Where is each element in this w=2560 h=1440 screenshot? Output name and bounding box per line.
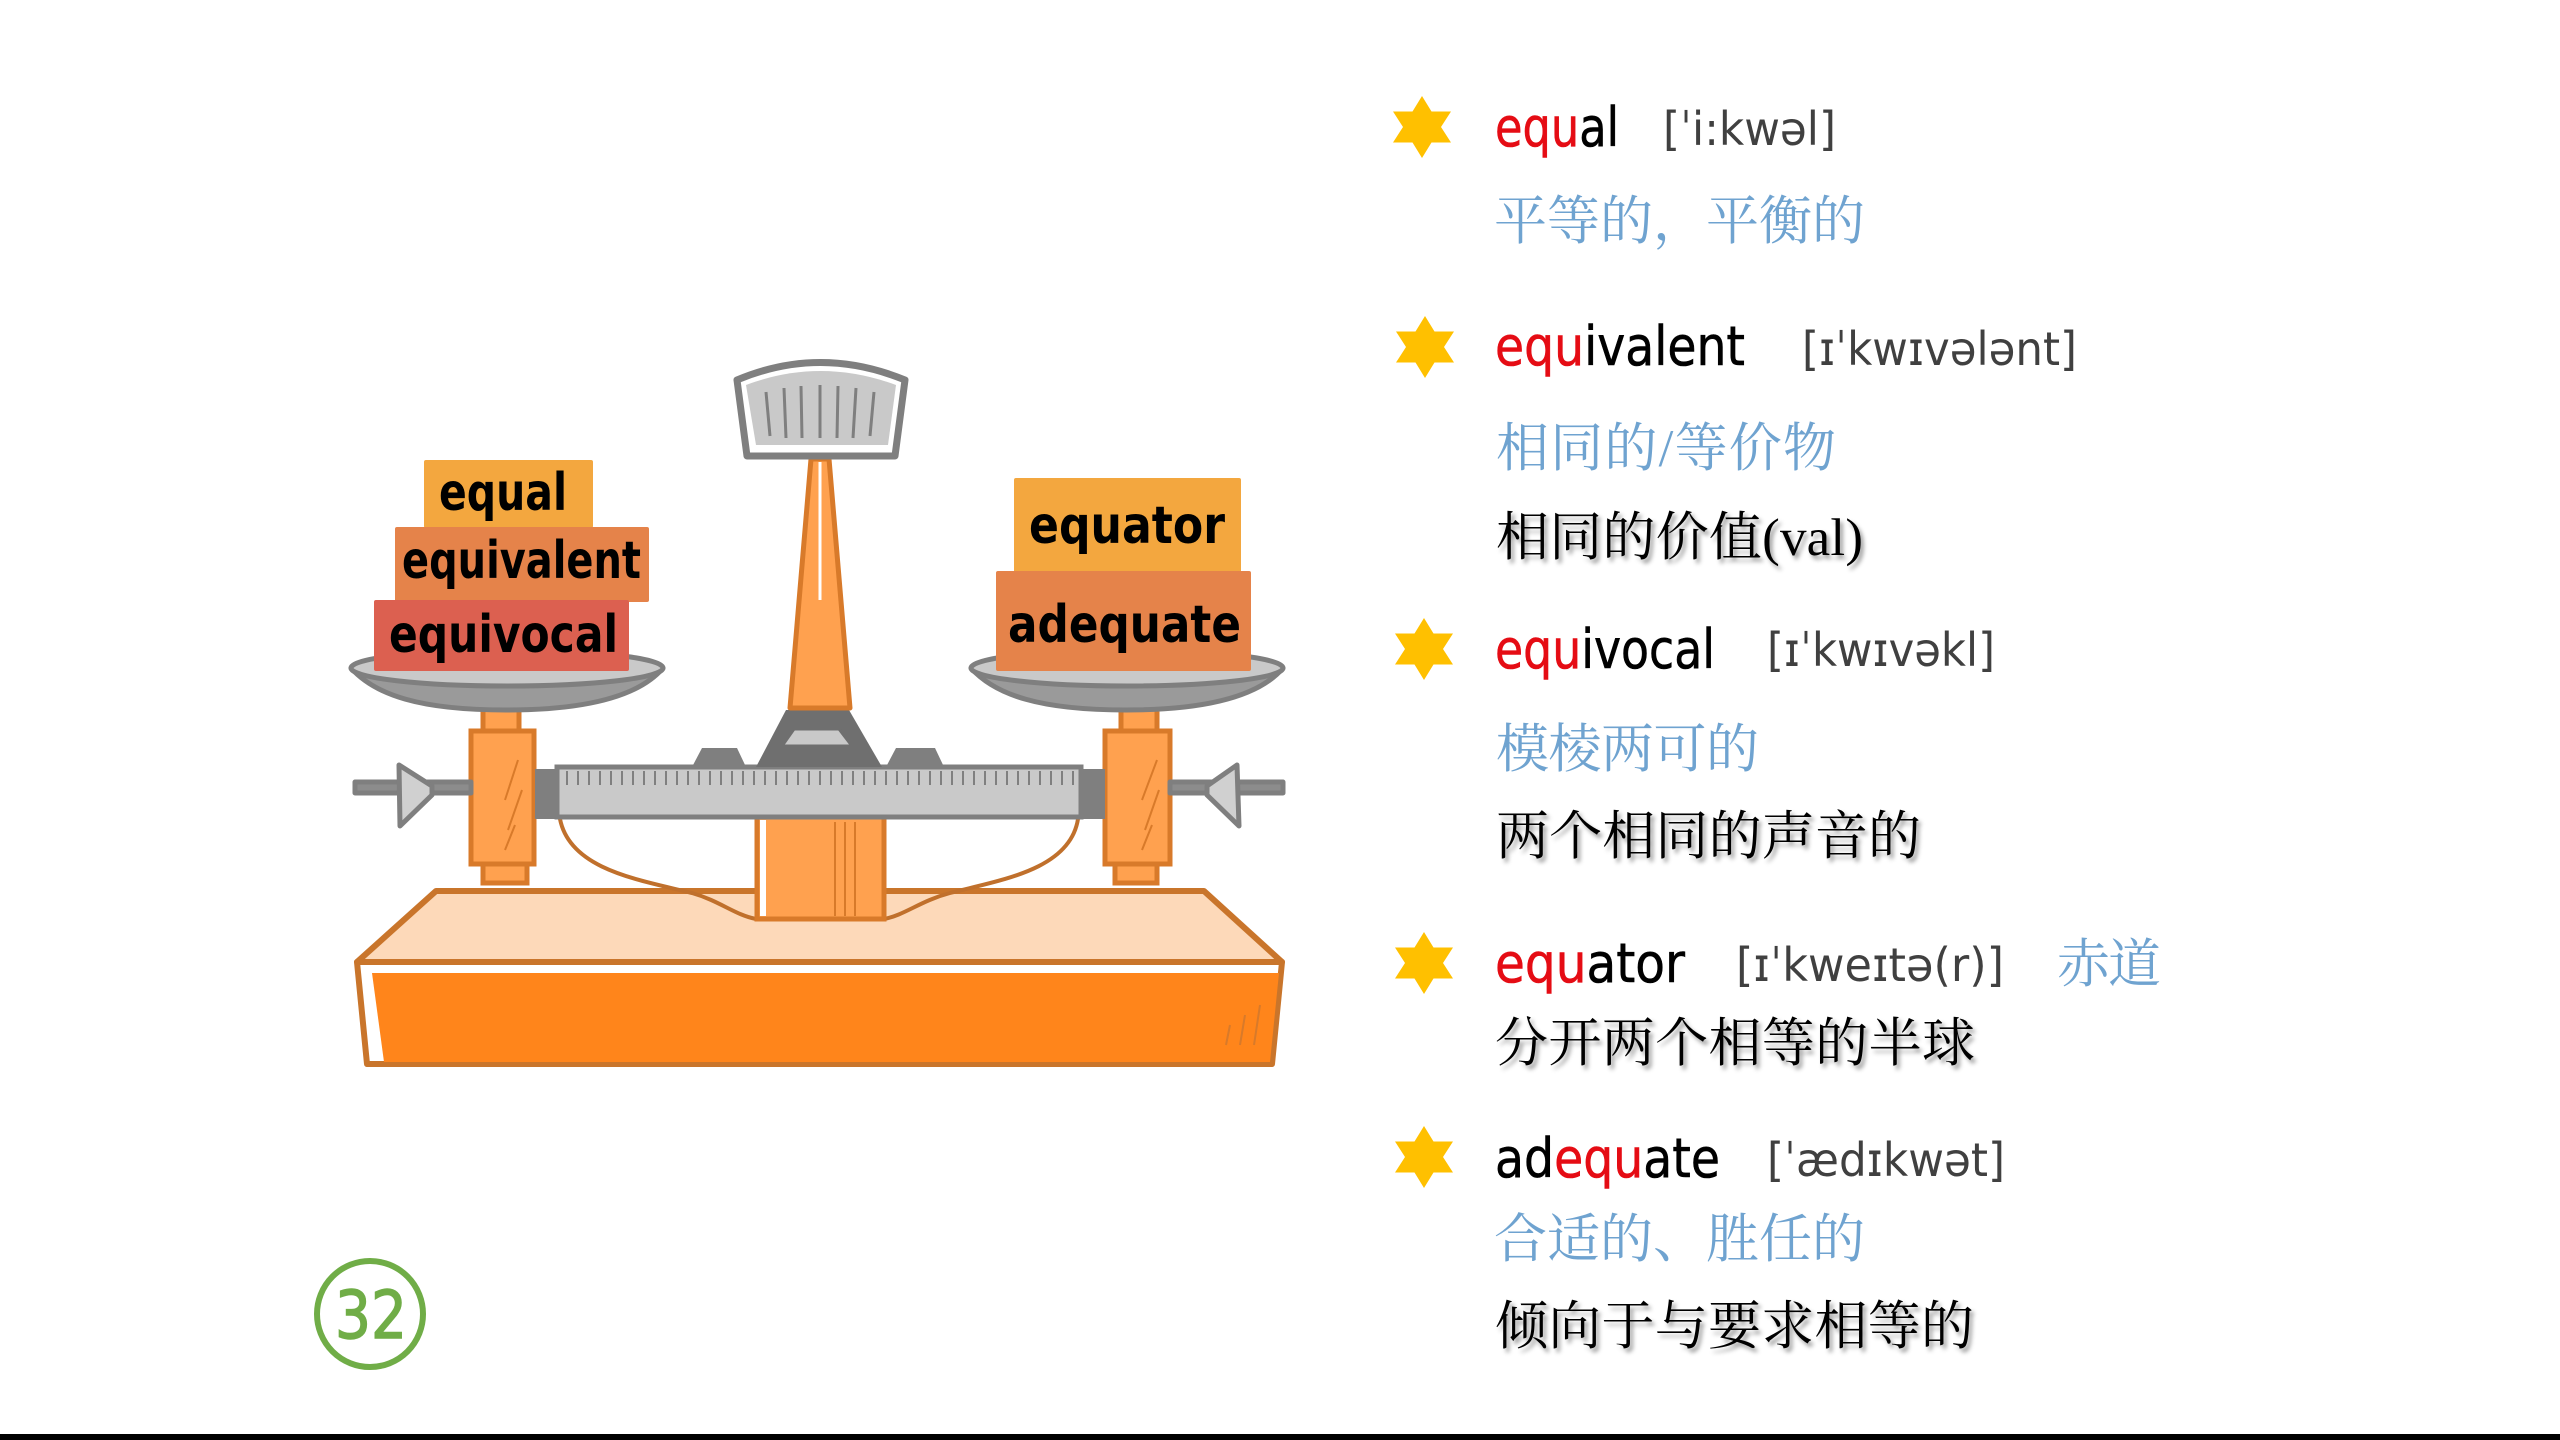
icon: star xyxy=(1395,932,1453,994)
page number badge: 32 xyxy=(335,1277,407,1354)
icon: star xyxy=(1395,618,1453,680)
wires xyxy=(560,819,1078,919)
word: equal xyxy=(1495,96,1619,159)
phonetic: [ɪˈkweɪtə(r)] xyxy=(1736,938,2004,992)
meaning: 赤道 xyxy=(2057,936,2161,994)
phonetic: [ˈædɪkwət] xyxy=(1767,1133,2005,1187)
block: equator: equator xyxy=(1029,496,1225,556)
block: equivocal: equivocal xyxy=(389,605,618,665)
right post xyxy=(1105,708,1170,883)
word: equivocal xyxy=(1495,618,1715,681)
block: equivalent: equivalent xyxy=(402,531,641,591)
bottom black bar xyxy=(0,1434,2560,1440)
memory note: 倾向于与要求相等的 xyxy=(1495,1298,1974,1356)
page number badge xyxy=(317,1261,423,1367)
meaning: 平等的，平衡的 xyxy=(1494,193,1865,251)
phonetic: [ˈi:kwəl] xyxy=(1663,102,1836,156)
illustration: balance scale xyxy=(351,362,1283,1064)
memory note: 相同的价值(val) xyxy=(1496,509,1863,567)
block: adequate: adequate xyxy=(1008,595,1241,655)
memory note: 分开两个相等的半球 xyxy=(1495,1015,1975,1073)
meaning: 合适的、胜任的 xyxy=(1494,1211,1865,1269)
entry: equivocal xyxy=(1395,618,1995,866)
word: equator xyxy=(1495,932,1686,995)
left post xyxy=(471,708,534,883)
meaning: 模棱两可的 xyxy=(1496,721,1759,779)
meaning: 相同的/等价物 xyxy=(1496,420,1836,478)
pointer support xyxy=(692,710,944,767)
entry: adequate xyxy=(1395,1126,2005,1356)
icon: star xyxy=(1395,1126,1453,1188)
entry: equator xyxy=(1395,932,2161,1073)
block: adequate xyxy=(996,571,1251,671)
block: equator xyxy=(1014,478,1241,573)
center column xyxy=(757,817,884,919)
phonetic: [ɪˈkwɪvəkl] xyxy=(1767,623,1995,677)
block: equal: equal xyxy=(439,463,567,523)
right pan xyxy=(971,650,1283,710)
icon: star xyxy=(1396,316,1454,378)
word: equivalent xyxy=(1495,315,1745,378)
icon: star xyxy=(1393,96,1451,158)
phonetic: [ɪˈkwɪvələnt] xyxy=(1802,322,2077,376)
right knob xyxy=(1170,765,1283,826)
block: equivalent xyxy=(395,527,649,602)
memory note: 两个相同的声音的 xyxy=(1496,808,1921,866)
scale base xyxy=(357,891,1282,1064)
entry: equivalent xyxy=(1396,315,2077,567)
left pan xyxy=(351,650,663,710)
gauge xyxy=(737,362,905,456)
word: adequate xyxy=(1495,1127,1720,1190)
left knob xyxy=(355,765,471,826)
beam with graduated ruler xyxy=(535,767,1105,819)
pointer needle xyxy=(790,459,850,708)
entry: equal xyxy=(1393,96,1865,251)
